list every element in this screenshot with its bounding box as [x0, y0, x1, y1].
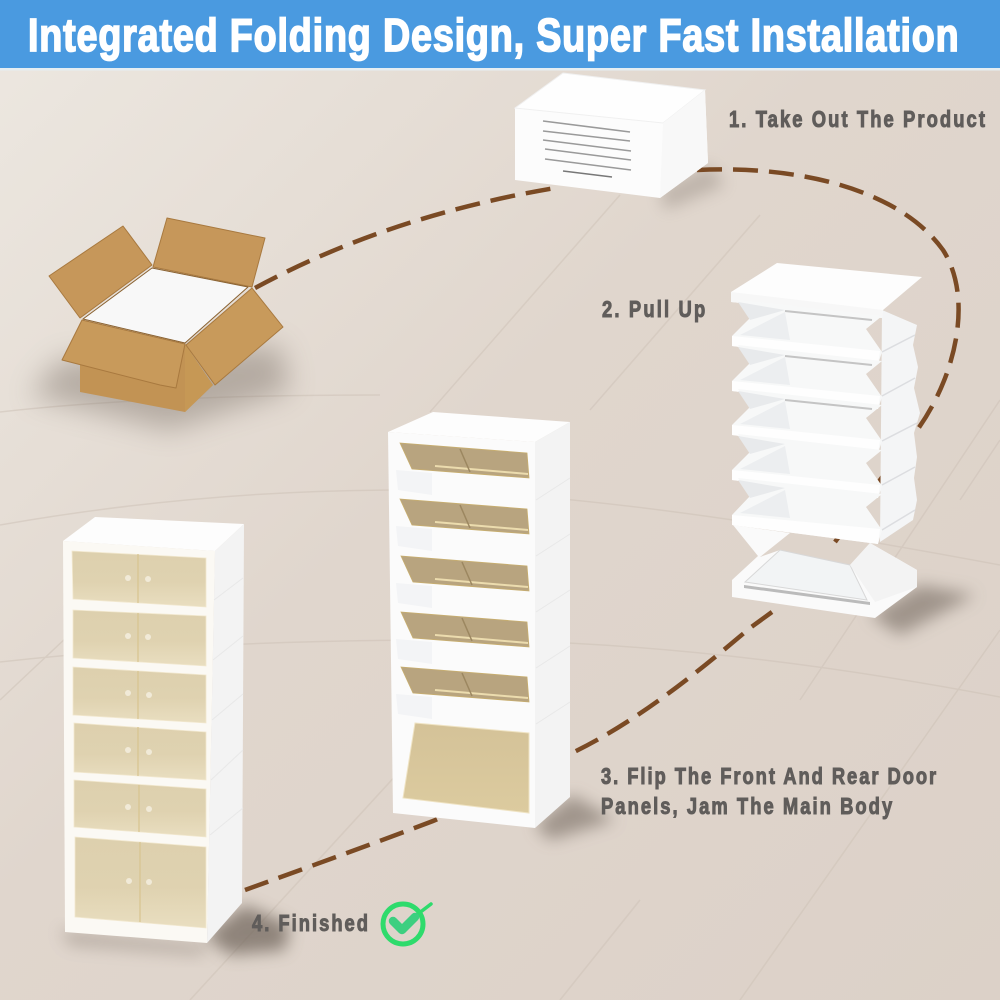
label: step 3: 3. Flip The Front And Rear Door: [601, 764, 936, 790]
flipped door rows: [400, 443, 529, 702]
floor shadows: [30, 165, 975, 955]
cabinet body: [63, 517, 244, 943]
title text: Integrated Folding Design, Super Fast Installation: [28, 9, 959, 61]
folded product cube: [515, 73, 708, 198]
shelf top: [731, 263, 922, 318]
shelf with doors half-flipped: [388, 412, 570, 828]
fold levels: [732, 300, 882, 544]
cabinet body: [388, 412, 570, 828]
dashed connector path: [245, 169, 959, 890]
shelf base: [732, 525, 917, 618]
icon: green check: [383, 904, 431, 944]
finished shelf: [63, 517, 244, 943]
door seams and knobs: [125, 554, 152, 922]
label: step 3 second line: Panels, Jam The Main Body: [601, 794, 893, 820]
transparent door panels: [72, 551, 206, 928]
half-open folding shelf: [731, 263, 922, 618]
label: step 4: 4. Finished: [252, 911, 368, 937]
label: step 2: 2. Pull Up: [602, 297, 705, 323]
lower shading strips: [396, 470, 432, 719]
open bottom door: [403, 723, 529, 813]
label: step 1: 1. Take Out The Product: [729, 107, 985, 133]
door highlights: [435, 449, 528, 698]
cardboard box: [49, 218, 283, 412]
right side column: [880, 310, 920, 542]
title banner: [0, 0, 1000, 70]
